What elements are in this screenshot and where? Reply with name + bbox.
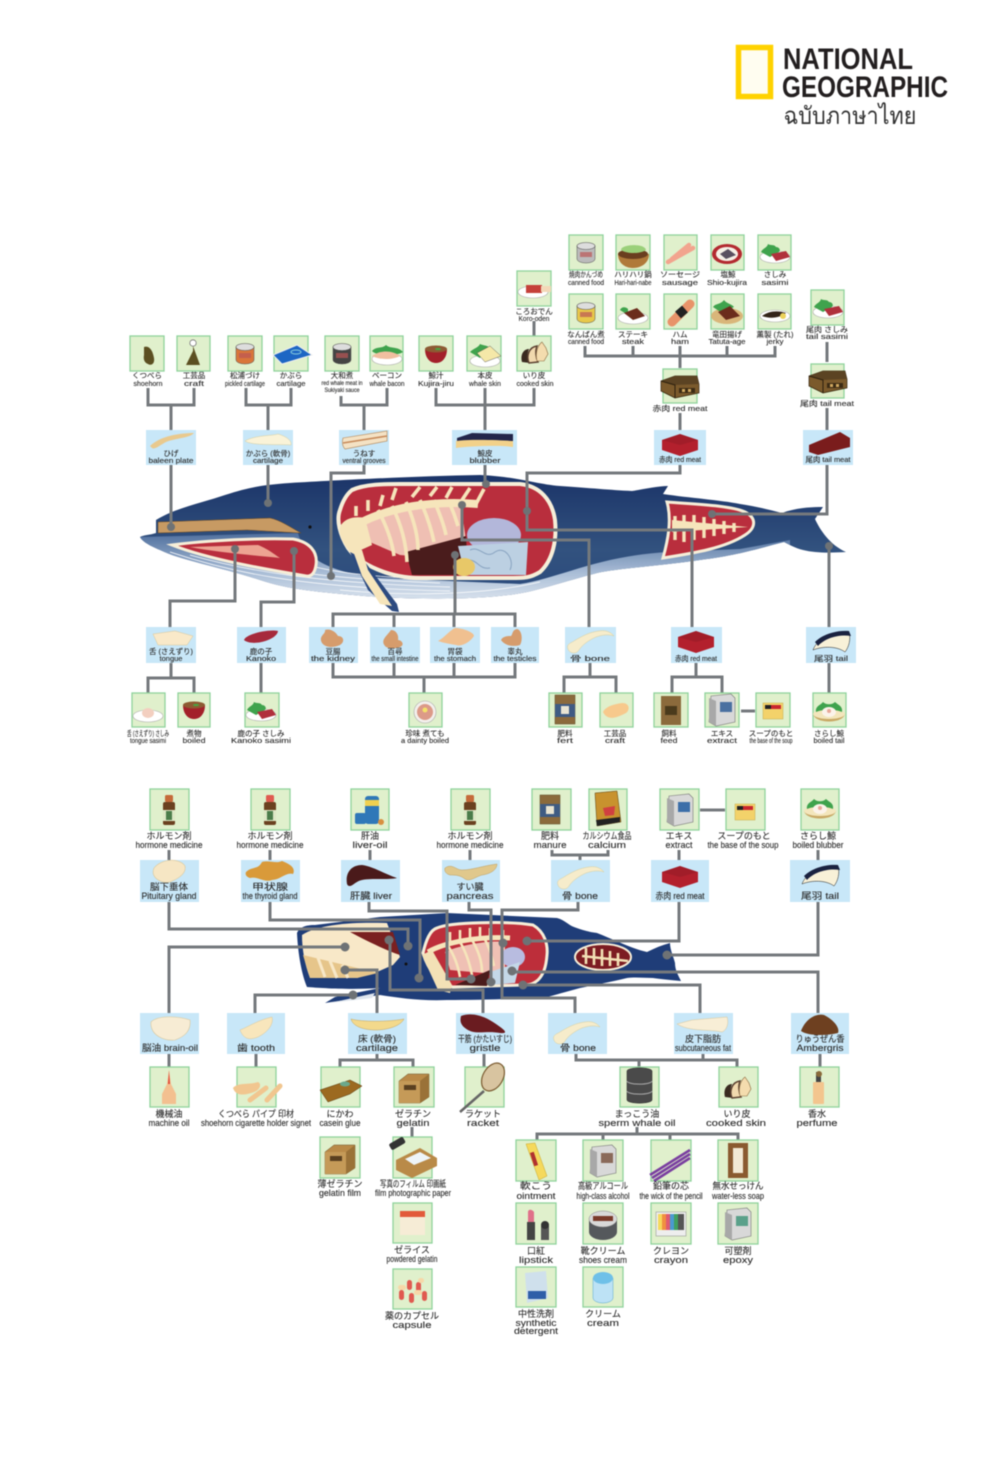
tile: tongue sasimi: 舌 (さえずり) さしみ: [127, 728, 169, 738]
tile: boiled tail: さらし鯨: [814, 728, 844, 738]
part: tongue: tongue: [160, 654, 182, 663]
part: baleen plate: [146, 430, 196, 465]
tile: red meat chest: [652, 369, 709, 413]
tile: canned food (yakiniku): 焼肉かんづめ: [569, 269, 603, 279]
connectors below baleen whale: [148, 663, 829, 711]
tile: shio-kujira: 塩鯨: [720, 269, 736, 279]
tile: ham: ハム: [672, 330, 688, 339]
part: kanoko: Kanoko: [246, 654, 276, 663]
tile: craft: [177, 336, 210, 388]
tile: high-class alcohol: [576, 1140, 630, 1201]
tile: craft (bone): 工芸品: [604, 728, 626, 738]
connector dots: sperm whale: [340, 936, 672, 1000]
part: stomach: the stomach: [434, 654, 476, 663]
tile: wick of the pencil: 鉛筆の芯: [653, 1180, 689, 1191]
tile: canned food (nanban): なんばん煮: [567, 329, 605, 339]
tile: cooked skin (sperm): [706, 1067, 766, 1128]
tile: epoxy: [718, 1203, 758, 1265]
tile: pickled cartilage: pickled cartilage: [225, 379, 265, 388]
tile: canned food (nanban): [567, 294, 605, 346]
tile: powdered gelatin: ゼライス: [394, 1244, 430, 1255]
tile: whale bacon: [369, 336, 404, 388]
tile: kanoko sasimi: [231, 693, 291, 745]
part: blubber: 鯨皮: [478, 448, 493, 458]
tile: casein glue: [320, 1067, 362, 1128]
tile: base of the soup (sperm): the base of the soup: [708, 840, 778, 850]
connectors into sperm whale: [169, 902, 818, 1013]
part: tail: 尾羽 tail: [814, 654, 848, 663]
tile: tail sasimi: [806, 290, 849, 341]
tile: tatuta-age: 竜田揚げ: [712, 329, 742, 339]
tile: cooked skin (sperm): cooked skin: [706, 1118, 766, 1128]
part: pituitary gland: Pituitary gland: [142, 891, 196, 901]
tile: base of the soup: [749, 693, 793, 745]
tile: crayon: crayon: [654, 1255, 688, 1265]
tile: whale skin: [467, 336, 501, 388]
tile: shoes cream: shoes cream: [579, 1255, 627, 1265]
part: pancreas: pancreas: [446, 891, 494, 901]
part: cartilage (sperm): cartilage: [356, 1043, 398, 1053]
tile: cream: [583, 1267, 623, 1328]
tile: steak: ステーキ: [618, 330, 648, 339]
tile: machine oil: 機械油: [155, 1108, 183, 1119]
tile: ointment: 軟こう: [520, 1180, 552, 1191]
connector dots: baleen whale: [167, 480, 833, 580]
part: tail meat: [803, 430, 853, 465]
tile: tail sasimi: tail sasimi: [806, 332, 848, 341]
tile: gelatin film: gelatin film: [319, 1188, 361, 1198]
part: small intestine: the small intestine: [372, 654, 418, 663]
part: ambergris: りゅうぜん香: [796, 1034, 844, 1044]
part: stomach: [430, 627, 480, 663]
tile: sasimi: さしみ: [764, 270, 787, 279]
tile: feed: 飼料: [662, 728, 677, 738]
part: red meat (sperm): [651, 860, 709, 902]
tile: cooked skin: いり皮: [523, 370, 546, 380]
connectors above sperm whale: [169, 810, 818, 860]
tile: kanoko sasimi: Kanoko sasimi: [231, 736, 291, 745]
tile: manure: [532, 789, 571, 850]
part: testicles: the testicles: [494, 654, 537, 663]
tile: lipstick: 口紅: [527, 1245, 545, 1256]
part: cartilage: かぶら (軟骨): [246, 448, 291, 458]
tile: boiled blubber: さらし鯨: [800, 831, 836, 841]
tile: hari-hari-nabe: Hari-hari-nabe: [614, 278, 652, 287]
baleen whale illustration: [140, 475, 846, 612]
tile: boiled blubber: [792, 789, 844, 850]
panel: baleen whale products: [127, 235, 856, 745]
part: small intestine: 百尋: [388, 647, 403, 656]
tile: sasimi: [758, 235, 791, 287]
tile: calcium: カルシウム食品: [582, 831, 632, 841]
tile: red meat chest: 赤肉 red meat: [652, 403, 709, 413]
part: thyroid gland: 甲状腺: [252, 881, 288, 892]
part: ambergris: Ambergris: [796, 1043, 844, 1053]
part: tongue: 舌 (さえずり): [149, 646, 193, 656]
tile: sperm whale oil: [598, 1067, 676, 1128]
tile: whale skin: whale skin: [468, 379, 501, 388]
part: tail meat: 尾肉 tail meat: [806, 454, 851, 464]
tile: synthetic detergent: 中性洗剤: [518, 1308, 554, 1319]
part: red meat (lower): [671, 627, 722, 663]
part: testicles: 睾丸: [508, 646, 523, 656]
tile: water-less soap: 無水せっけん: [712, 1180, 764, 1191]
tile: kujira-jiru: [418, 336, 454, 388]
tile: film photographic paper: film photographic paper: [375, 1188, 451, 1198]
tile: jerky: jerky: [765, 337, 784, 346]
tile: boiled: [178, 693, 210, 745]
tile: boiled tail: [813, 693, 846, 745]
tile: hormone medicine (thyroid): hormone medicine: [236, 840, 304, 850]
part: ventral grooves: うねす: [353, 449, 375, 458]
tile: racket: [460, 1059, 509, 1128]
part: bone (sperm, lower): [548, 1013, 607, 1054]
tile: casein glue: casein glue: [320, 1118, 360, 1128]
tile: wick of the pencil: [640, 1140, 702, 1201]
tile: shio-kujira: [707, 235, 748, 287]
logo yellow rectangle: [738, 48, 770, 96]
tile: ham: [664, 294, 697, 346]
tile: whale skin: 本皮: [478, 370, 493, 380]
tile: gelatin: ゼラチン: [395, 1108, 431, 1119]
tile: red whale meat in sukiyaki sauce: 大和煮: [331, 370, 354, 380]
tile: whale bacon: ベーコン: [372, 371, 402, 380]
tile: canned food (yakiniku): [568, 235, 604, 287]
part: liver: 肝臓 liver: [350, 891, 392, 901]
tile: hari-hari-nabe: ハリハリ鍋: [614, 269, 652, 279]
tile: gelatin film: [317, 1137, 363, 1198]
part: baleen plate: baleen plate: [148, 456, 194, 465]
tile: tail sasimi: 尾肉 さしみ: [806, 324, 849, 334]
tile: boiled: boiled: [182, 736, 206, 745]
tile: gelatin film: 薄ゼラチン: [317, 1178, 363, 1189]
tile: sperm whale oil: sperm whale oil: [598, 1118, 676, 1128]
part: brain-oil: [140, 1013, 199, 1054]
tile: cartilage: cartilage: [276, 379, 306, 388]
tile: kujira-jiru: 鯨汁: [428, 370, 444, 380]
tile: synthetic detergent: detergent: [514, 1326, 559, 1336]
tile: epoxy: epoxy: [723, 1255, 754, 1265]
part: tooth: 歯 tooth: [237, 1043, 275, 1053]
part: kanoko: 鹿の子: [250, 646, 273, 656]
tile: hormone medicine (pituitary): hormone medicine: [136, 840, 202, 850]
tile: shoehorn: くつべら: [132, 371, 162, 380]
tile: red whale meat in sukiyaki sauce: [322, 336, 363, 394]
tile: base of the soup (sperm): スープのもと: [717, 831, 771, 841]
part: pancreas: すい臓: [456, 882, 484, 892]
tile: lipstick: [516, 1203, 556, 1265]
tile: craft: craft: [184, 379, 205, 388]
tile: film photographic paper: 写真のフィルム 印画紙: [380, 1178, 446, 1189]
tile: dainty boiled: 珍味 煮ても: [405, 728, 445, 738]
tile: gelatin: gelatin: [396, 1118, 430, 1128]
tile: high-class alcohol: high-class alcohol: [576, 1191, 630, 1201]
tile: crayon: [651, 1203, 691, 1265]
tile: calcium: [582, 789, 632, 850]
tile: manure: manure: [534, 840, 566, 850]
tile: perfume: perfume: [796, 1118, 838, 1128]
tile: koro-oden: [515, 271, 553, 323]
tile: cream: cream: [587, 1318, 619, 1328]
tile: pickled cartilage: 松浦づけ: [230, 370, 260, 380]
tile: perfume: 香水: [808, 1108, 826, 1119]
tile: manure: 肥料: [541, 830, 559, 841]
part: stomach: 胃袋: [448, 646, 463, 656]
tile: synthetic detergent: [514, 1267, 559, 1336]
tile: red whale meat in sukiyaki sauce: Sukiyaki sauce: [324, 387, 360, 394]
tile: boiled blubber: boiled blubber: [792, 840, 844, 850]
tile: pickled cartilage: [225, 336, 265, 388]
tile: kanoko sasimi: 鹿の子 さしみ: [237, 728, 285, 738]
part: testicles: [491, 627, 539, 663]
tile: shoes cream: 靴クリーム: [581, 1245, 625, 1256]
tile: hormone medicine (pancreas): hormone medicine: [436, 840, 504, 850]
tile: feed: [654, 693, 688, 745]
part: pancreas: [442, 860, 500, 902]
tile: capsule: [385, 1269, 439, 1330]
tile: extract: エキス: [711, 729, 733, 738]
part: cartilage: [243, 430, 293, 465]
tile: shoehorn cigarette holder signet: [201, 1067, 311, 1128]
tile: casein glue: にかわ: [326, 1109, 354, 1119]
part: kidney: 豆腸: [326, 647, 341, 656]
part: thyroid gland: [241, 860, 300, 902]
tile: hormone medicine (thyroid): [236, 789, 304, 850]
tile: craft (bone): [600, 693, 633, 745]
tile: hormone medicine (pancreas): ホルモン剤: [447, 831, 493, 841]
tile: extract: [705, 693, 739, 745]
connectors above baleen whale: [148, 321, 827, 430]
tile: cooked skin: [516, 336, 554, 388]
tile: ham: ham: [671, 337, 689, 346]
part: bone (baleen): [565, 627, 616, 663]
tile: fert: [549, 693, 582, 745]
part: gristle: gristle: [470, 1043, 500, 1053]
tile: extract (sperm): [660, 789, 699, 850]
tile: tatuta-age: Tatuta-age: [708, 337, 746, 346]
part: cartilage (sperm): 床 (軟骨): [358, 1033, 396, 1044]
tile: fert: fert: [557, 736, 574, 745]
tile: capsule: capsule: [392, 1320, 432, 1330]
part: bone (sperm, top): 骨 bone: [562, 891, 598, 901]
tile: canned food (nanban): canned food: [568, 337, 604, 346]
tile: boiled: 煮物: [186, 728, 202, 738]
tile: ointment: [516, 1140, 556, 1201]
tile: tail meat chest: 尾肉 tail meat: [800, 398, 855, 408]
tile: steak: steak: [622, 337, 644, 346]
panel: sperm whale products: [136, 789, 850, 1336]
connectors into baleen whale: [170, 465, 829, 628]
tile: koro-oden: Koro-oden: [518, 314, 550, 323]
part: red meat (lower): 赤肉 red meat: [675, 653, 718, 663]
part: cartilage: cartilage: [253, 456, 283, 465]
sperm whale illustration: [297, 913, 681, 1003]
tile: base of the soup (sperm): [708, 789, 778, 850]
part: subcutaneous fat: [674, 1013, 733, 1054]
tile: sausage: sausage: [662, 278, 698, 287]
tile: liver oil: [351, 789, 389, 850]
tile: dainty boiled: [401, 693, 449, 745]
tile: extract: extract: [707, 736, 738, 745]
logo: National Geographic Thailand: [738, 43, 948, 130]
tile: gelatin: [394, 1067, 434, 1128]
tile: sausage: [660, 235, 701, 287]
logo: National Geographic Thailand: ฉบับภาษาไทย: [784, 102, 916, 130]
tile: whale bacon: whale bacon: [369, 379, 404, 388]
tile: extract (sperm): extract: [666, 840, 693, 850]
tile: tongue sasimi: tongue sasimi: [130, 736, 166, 745]
tile: high-class alcohol: 高級アルコール: [578, 1180, 628, 1191]
part: tail (sperm): [790, 860, 850, 902]
part: ventral grooves: [339, 430, 389, 465]
part: ambergris: [791, 1013, 849, 1054]
connectors below sperm whale: [169, 1054, 820, 1140]
part: kidney: [309, 627, 358, 663]
part: tail: [806, 627, 856, 663]
tile: cream: クリーム: [585, 1309, 621, 1319]
tile: lipstick: lipstick: [519, 1255, 554, 1265]
part: liver: [341, 860, 400, 902]
tile: hormone medicine (pituitary): [136, 789, 202, 850]
tile: perfume: [796, 1067, 839, 1128]
part: thyroid gland: the thyroid gland: [242, 891, 298, 901]
tile: sausage: ソーセージ: [660, 270, 701, 279]
tile: racket: racket: [467, 1118, 500, 1128]
tile: synthetic detergent: synthetic: [516, 1318, 557, 1328]
part: kidney: the kidney: [311, 654, 355, 663]
part: tail (sperm): 尾羽 tail: [801, 891, 839, 901]
tile: hari-hari-nabe: [614, 235, 652, 287]
part: blubber: blubber: [470, 456, 501, 465]
tile: powdered gelatin: [386, 1203, 438, 1264]
tile: jerky: [756, 294, 794, 346]
tile: steak: [616, 294, 650, 346]
tile: shoehorn: [130, 336, 164, 388]
part: ventral grooves: ventral grooves: [342, 456, 386, 465]
part: gristle: 干筋 (かたいすじ): [458, 1033, 512, 1044]
part: cartilage (sperm): [348, 1013, 407, 1054]
part: subcutaneous fat: subcutaneous fat: [675, 1043, 731, 1053]
part: brain-oil: 脳油 brain-oil: [142, 1042, 198, 1053]
part: blubber: [452, 430, 517, 465]
tile: capsule: 薬のカプセル: [385, 1310, 439, 1321]
part: kanoko: [237, 627, 286, 663]
tile: liver oil: liver-oil: [352, 840, 388, 850]
part: bone (baleen): 骨 bone: [570, 654, 610, 663]
tile: cooked skin (sperm): いり皮: [723, 1108, 751, 1119]
tile: crayon: クレヨン: [653, 1246, 689, 1256]
part: red meat (sperm): 赤肉 red meat: [656, 890, 705, 901]
tile: cartilage: [273, 336, 312, 388]
tile: fert: 肥料: [558, 728, 573, 738]
tile: calcium: calcium: [588, 840, 626, 850]
tile: film photographic paper: [375, 1136, 451, 1198]
part: tongue: [146, 627, 196, 663]
tile: machine oil: [148, 1067, 190, 1128]
tile: feed: feed: [660, 736, 678, 745]
tile: liver oil: 肝油: [361, 830, 379, 841]
tile: racket: ラケット: [465, 1109, 501, 1119]
tile: hormone medicine (pancreas): [436, 789, 504, 850]
tile: sasimi: sasimi: [762, 278, 789, 287]
tile: shoehorn: shoehorn: [134, 379, 162, 388]
tile: craft (bone): craft: [605, 736, 626, 745]
tile: hormone medicine (thyroid): ホルモン剤: [247, 831, 293, 841]
tile: shoehorn cigarette holder signet: くつべら パイプ 印材: [218, 1108, 294, 1119]
part: subcutaneous fat: 皮下脂肪: [685, 1033, 721, 1044]
tile: shoehorn cigarette holder signet: shoehorn cigarette holder signet: [201, 1118, 311, 1128]
part: pituitary gland: [140, 860, 199, 902]
tile: extract (sperm): エキス: [666, 831, 692, 841]
tile: cartilage: かぶら: [280, 371, 302, 380]
tile: craft: 工芸品: [183, 370, 205, 380]
part: baleen plate: ひげ: [164, 449, 179, 458]
part: gristle: [456, 1013, 514, 1054]
tile: boiled tail: boiled tail: [814, 736, 845, 745]
tile: machine oil: machine oil: [148, 1118, 190, 1128]
part: red meat: [654, 430, 706, 465]
part: pituitary gland: 脳下垂体: [150, 881, 188, 892]
tile: sperm whale oil: まっこう油: [615, 1108, 659, 1119]
tile: jerky: 薫製 (たれ): [756, 329, 794, 339]
part: tooth: [227, 1013, 285, 1054]
tile: koro-oden: ころおでん: [515, 307, 553, 316]
tile: dainty boiled: a dainty boiled: [401, 736, 449, 745]
tile: cooked skin: cooked skin: [516, 379, 554, 388]
logo wordmark: NATIONAL: [783, 43, 913, 76]
logo: National Geographic Thailand: GEOGRAPHIC: [782, 71, 948, 104]
tile: canned food (yakiniku): canned food: [568, 278, 604, 287]
part: red meat: 赤肉 red meat: [659, 454, 702, 464]
tile: water-less soap: [711, 1140, 764, 1201]
tile: powdered gelatin: powdered gelatin: [386, 1254, 438, 1264]
part: small intestine: [370, 627, 420, 663]
tile: shio-kujira: Shio-kujira: [707, 278, 748, 287]
part: bone (sperm, top): [551, 860, 610, 902]
tile: base of the soup: スープのもと: [749, 729, 793, 738]
part: bone (sperm, lower): 骨 bone: [560, 1043, 596, 1053]
tile: hormone medicine (pituitary): ホルモン剤: [146, 831, 192, 841]
tile: water-less soap: water-less soap: [711, 1191, 764, 1201]
tile: ointment: ointment: [516, 1191, 556, 1201]
tile: wick of the pencil: the wick of the pencil: [640, 1191, 702, 1201]
tile: tail meat chest: [800, 364, 855, 408]
tile: base of the soup: the base of the soup: [750, 736, 792, 745]
tile: red whale meat in sukiyaki sauce: red whale meat in: [322, 380, 363, 387]
tile: shoes cream: [579, 1203, 627, 1265]
tile: tongue sasimi: [127, 693, 169, 745]
tile: tatuta-age: [708, 294, 746, 346]
tile: kujira-jiru: Kujira-jiru: [418, 379, 454, 388]
tile: epoxy: 可塑剤: [724, 1245, 752, 1256]
